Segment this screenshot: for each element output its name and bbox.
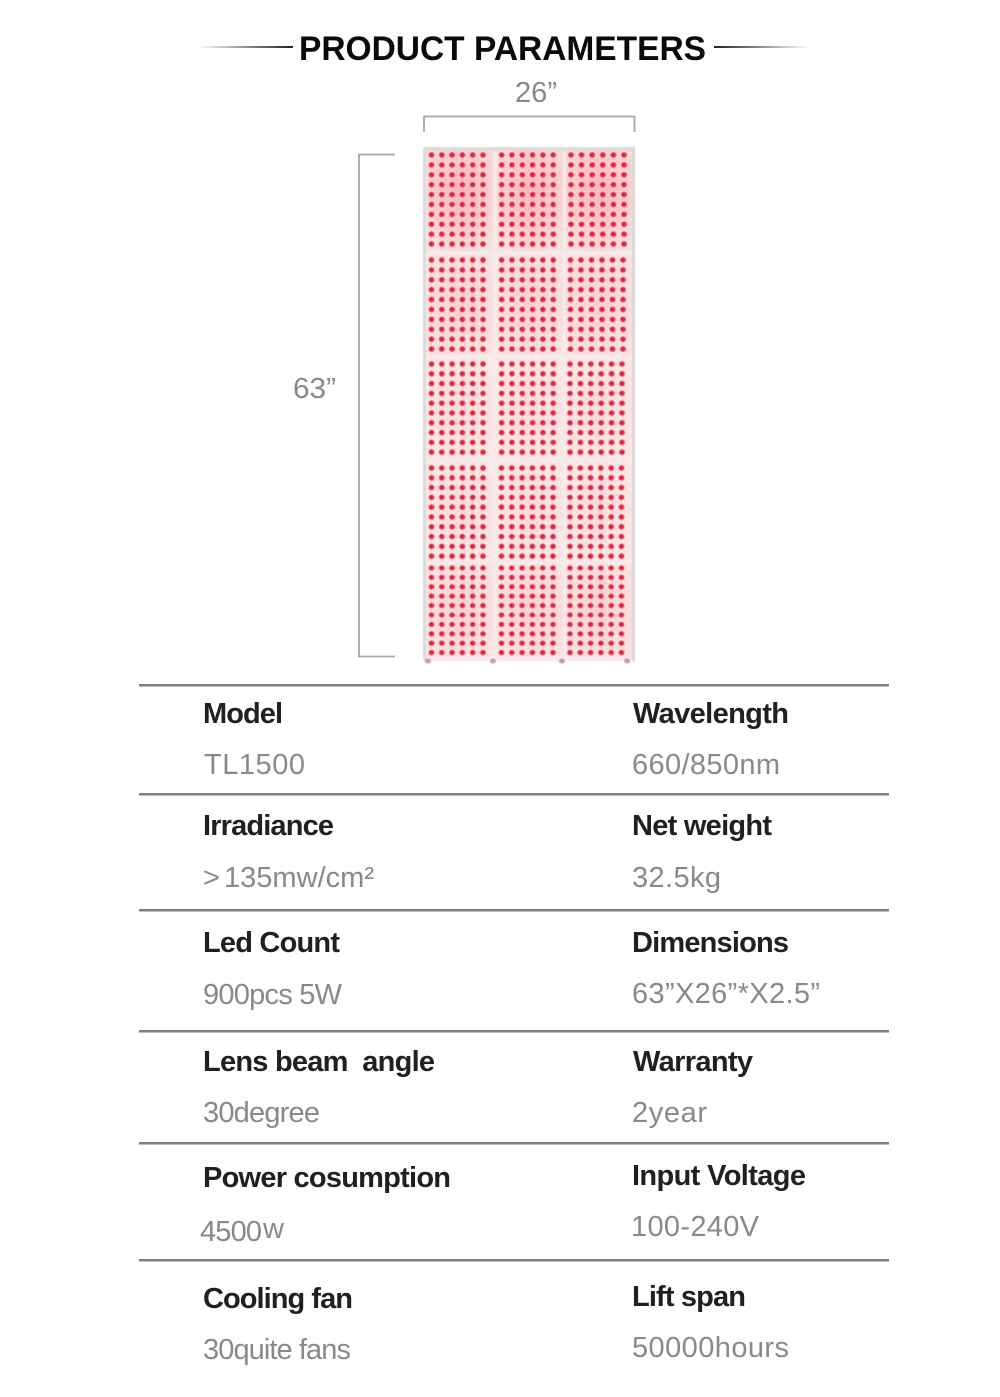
parameter: Power cosumption	[200, 1162, 451, 1248]
parameter: Lens beam angle	[203, 1046, 435, 1129]
parameter: Model	[203, 698, 305, 781]
parameter: Input Voltage: 100-240V	[631, 1211, 760, 1243]
parameter: Model: Model	[203, 698, 283, 730]
parameter: Power cosumption: Power cosumption	[203, 1162, 451, 1194]
parameter: Cooling fan: Cooling fan	[203, 1283, 353, 1315]
parameter: Irradiance: 135mw/cm²	[224, 862, 374, 894]
parameter: Dimensions: 63”X26”*X2.5”	[632, 978, 820, 1010]
parameter: Dimensions: Dimensions	[632, 927, 789, 959]
parameter: Lift span	[632, 1281, 789, 1364]
parameter: Irradiance	[203, 810, 374, 894]
parameter: Model: TL1500	[204, 749, 305, 781]
parameter: Power cosumption: 4500	[200, 1216, 262, 1248]
parameter: Lift span: Lift span	[632, 1281, 746, 1313]
LED panel product image	[423, 147, 635, 664]
title: PRODUCT PARAMETERS	[299, 30, 706, 68]
parameter: Wavelength: Wavelength	[633, 698, 789, 730]
parameter: Input Voltage	[631, 1160, 806, 1243]
parameter: Net weight: 32.5kg	[632, 862, 721, 894]
parameter: Lens beam angle: 30degree	[203, 1097, 320, 1129]
height dimension: 63 inches: 63”	[293, 373, 336, 405]
parameter: Lift span: 50000hours	[632, 1332, 789, 1364]
parameter: Led Count	[203, 927, 343, 1011]
height dimension: 63 inches	[293, 154, 395, 656]
width dimension: 26 inches	[424, 77, 634, 132]
parameter: Irradiance: Irradiance	[203, 810, 334, 842]
parameter: Cooling fan: 30quite fans	[203, 1334, 351, 1366]
parameter: Warranty: 2year	[632, 1097, 707, 1129]
width dimension: 26 inches: 26”	[515, 77, 557, 109]
parameter: Net weight	[632, 810, 772, 894]
parameter: Wavelength: 660/850nm	[632, 749, 780, 781]
parameter: Dimensions	[632, 927, 820, 1010]
parameter: Net weight: Net weight	[632, 810, 772, 842]
parameter: Input Voltage: Input Voltage	[632, 1160, 806, 1192]
table divider lines	[139, 684, 889, 1262]
parameter: Lens beam angle: Lens beam angle	[203, 1046, 435, 1078]
parameter: Wavelength	[632, 698, 789, 781]
parameter: Warranty	[632, 1046, 753, 1129]
parameter: Cooling fan	[203, 1283, 353, 1366]
parameter: Led Count: 900pcs 5W	[203, 979, 343, 1011]
parameter: Power cosumption: w	[262, 1213, 285, 1245]
parameter: Warranty: Warranty	[633, 1046, 753, 1078]
parameter: Irradiance: >	[203, 862, 220, 894]
parameter: Led Count: Led Count	[203, 927, 340, 959]
